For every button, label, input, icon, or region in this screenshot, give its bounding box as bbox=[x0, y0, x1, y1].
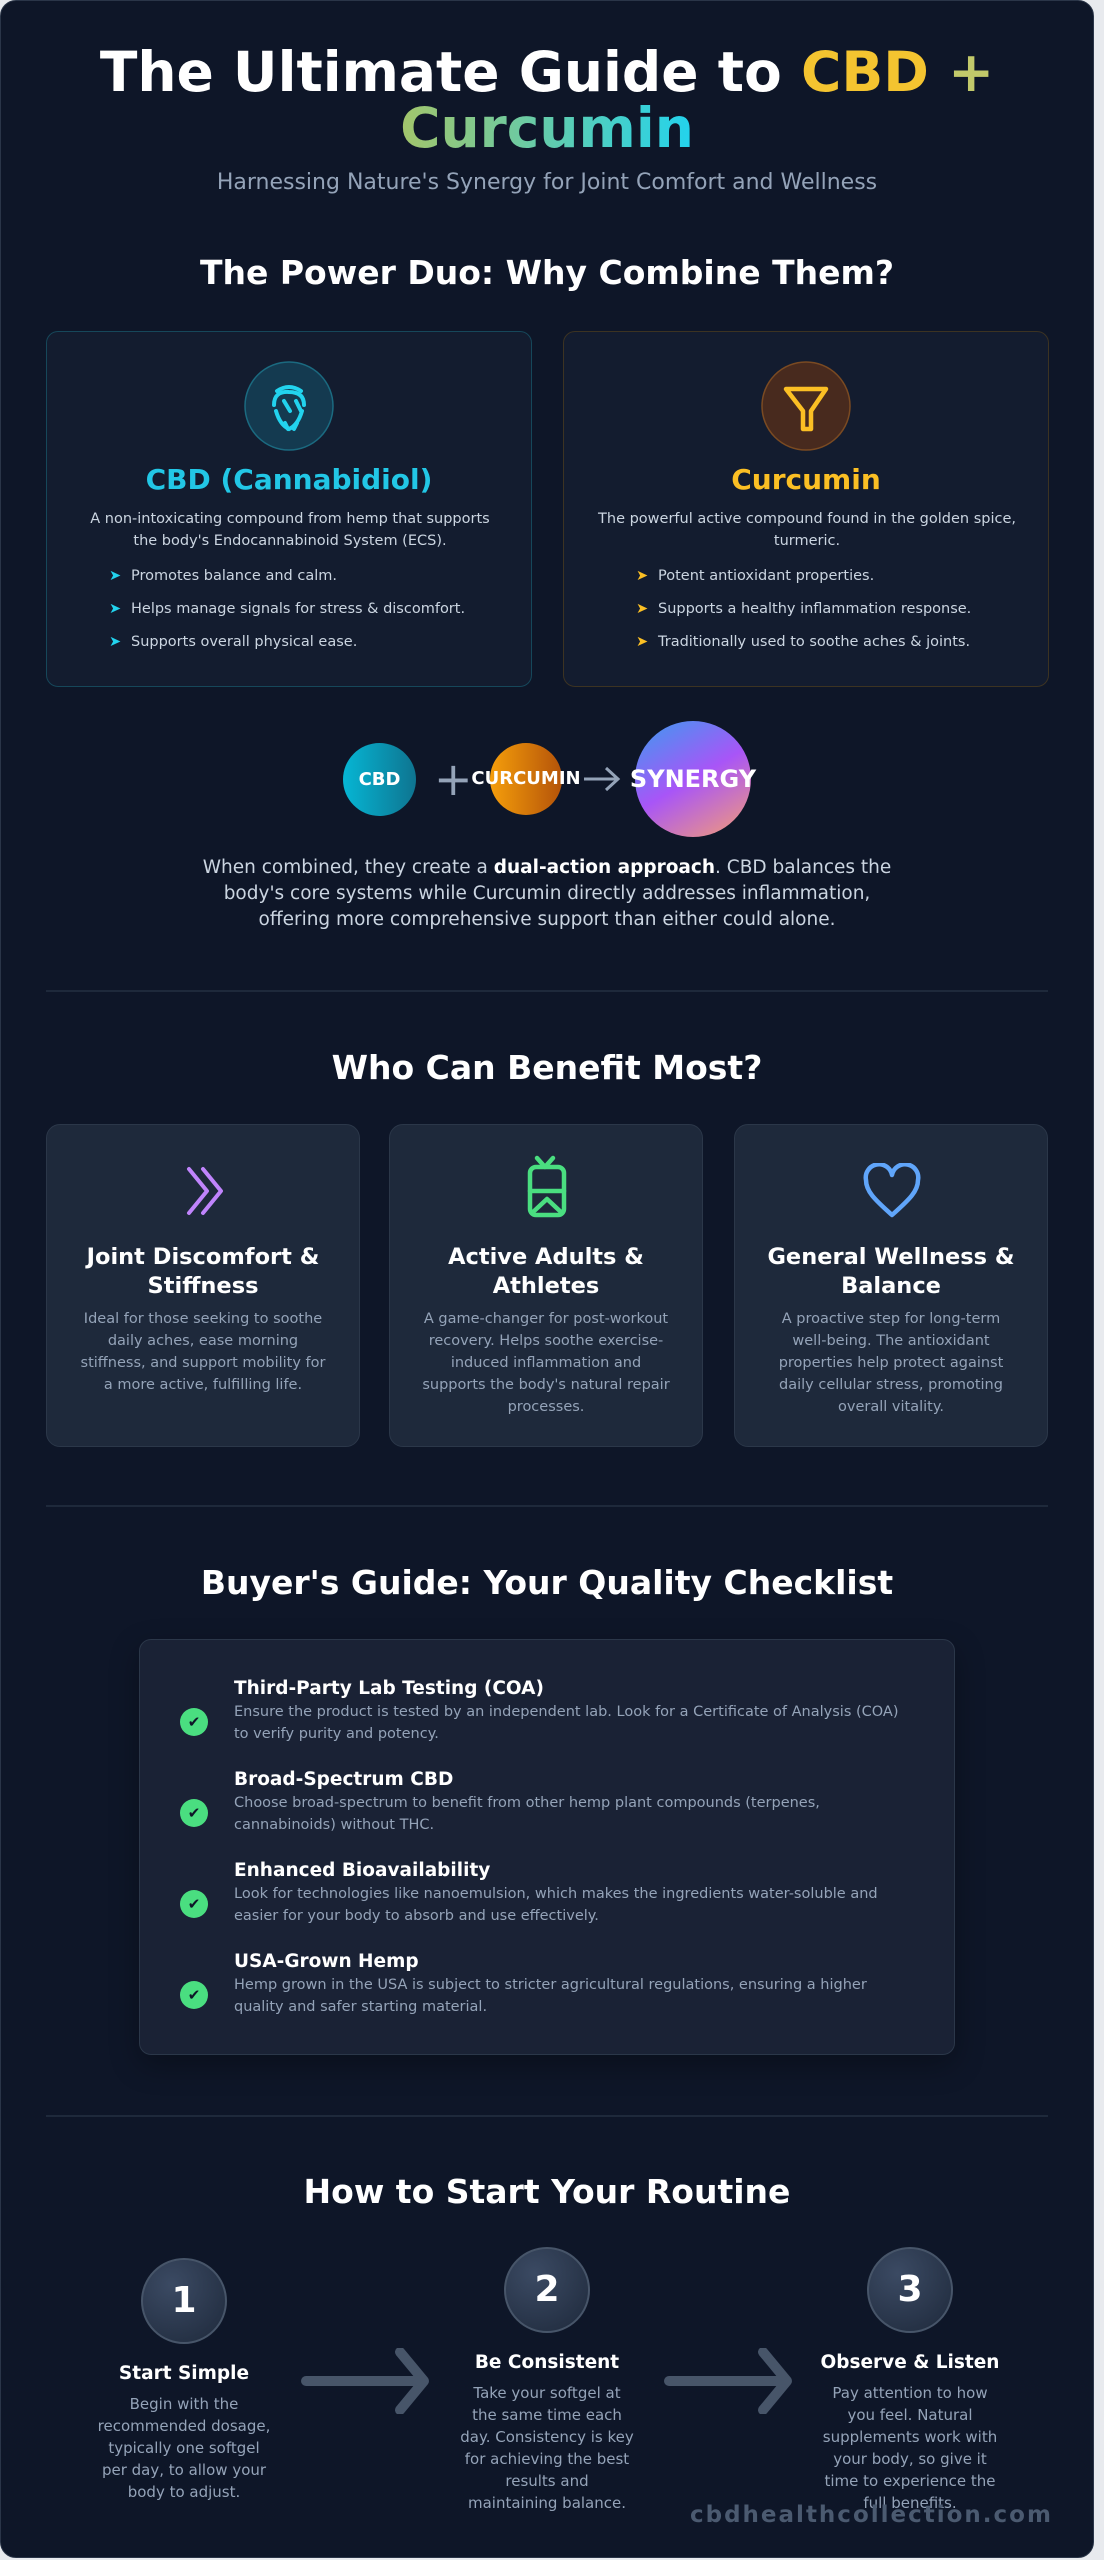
icon: funnel bbox=[761, 361, 851, 451]
item: broad spectrum bbox=[180, 1769, 820, 1833]
icon: CBD bbox=[244, 361, 334, 451]
icon: chevrons bbox=[186, 1166, 223, 1216]
icon: green bbox=[528, 1156, 566, 1218]
step 1: 1 bbox=[171, 2280, 197, 2321]
panel: CBD: Helps manage signals for stress & discomfort. bbox=[131, 601, 465, 617]
title bbox=[100, 40, 994, 160]
card title: CBD (Cannabidiol) bbox=[146, 463, 432, 496]
bullets: ➤ bbox=[636, 568, 648, 584]
step 3: Pay attention to how you feel. Natural supplements work with your body, so give it time to experience the full benefits. bbox=[823, 2384, 997, 2512]
card: athletes: A game-changer for post-workout recovery. Helps soothe exercise-induced inflammation and supports the body's natural repair processes. bbox=[422, 1311, 670, 1415]
circle: Curcumin bbox=[490, 743, 562, 815]
text: USA-Grown Hemp bbox=[234, 1951, 419, 1972]
icon: heart bbox=[864, 1163, 920, 1218]
circle: synergy bbox=[635, 721, 751, 837]
panel: Curcumin: ➤ bbox=[636, 601, 648, 617]
step 3 bbox=[820, 2247, 999, 2512]
panel: Curcumin: Traditionally used to soothe aches & joints. bbox=[658, 634, 970, 650]
bullets: Promotes balance and calm. bbox=[131, 568, 337, 584]
text: Hemp grown in the USA is subject to stricter agricultural regulations, ensuring a higher bbox=[234, 1977, 867, 1993]
circle: CBD: CBD bbox=[359, 769, 400, 790]
text: ✔ bbox=[188, 1804, 200, 1822]
card: joint bbox=[46, 1124, 360, 1447]
subtitle: Harnessing Nature's Synergy for Joint Comfort and Wellness bbox=[217, 170, 877, 195]
heading: who benefits: Who Can Benefit Most? bbox=[332, 1048, 762, 1087]
heading: buyer's guide: Buyer's Guide: Your Quality Checklist bbox=[201, 1563, 893, 1602]
card: wellness: Balance bbox=[841, 1273, 941, 1299]
step 2: Take your softgel at the same time each day. Consistency is key for achieving the best results and maintaining balance. bbox=[460, 2384, 634, 2512]
step 1 bbox=[98, 2258, 270, 2501]
panel: Curcumin: ➤ bbox=[636, 634, 648, 650]
item: usa hemp bbox=[180, 1951, 867, 2015]
circle: Curcumin: CURCUMIN bbox=[471, 768, 581, 789]
arrow bbox=[584, 767, 620, 791]
text: ✔ bbox=[188, 1986, 200, 2004]
circle: synergy: SYNERGY bbox=[630, 765, 756, 793]
step 1: Begin with the recommended dosage, typically one softgel per day, to allow your body to adjust. bbox=[98, 2395, 270, 2501]
card: athletes bbox=[389, 1124, 703, 1447]
panel: Curcumin bbox=[563, 331, 1049, 687]
title: The Ultimate Guide to CBD + bbox=[100, 40, 994, 104]
watermark: cbdhealthcollection.com bbox=[690, 2502, 1053, 2528]
text: Look for technologies like nanoemulsion, which makes the ingredients water-soluble and bbox=[234, 1886, 878, 1902]
heading: routine: How to Start Your Routine bbox=[304, 2172, 790, 2211]
step 3: 3 bbox=[897, 2269, 923, 2310]
arrow 2 bbox=[664, 2348, 792, 2414]
card title: Curcumin bbox=[731, 463, 881, 496]
step 1: Start Simple bbox=[119, 2363, 249, 2384]
text: ✔ bbox=[188, 1895, 200, 1913]
panel: CBD: ➤ bbox=[109, 601, 121, 617]
circle: CBD bbox=[343, 743, 416, 816]
text: Third-Party Lab Testing (COA) bbox=[234, 1678, 544, 1699]
bullets: Potent antioxidant properties. bbox=[658, 568, 874, 584]
panel: CBD: ➤ bbox=[109, 634, 121, 650]
card: joint: Stiffness bbox=[148, 1273, 258, 1299]
step 3: Observe & Listen bbox=[820, 2352, 999, 2373]
text: ✔ bbox=[188, 1713, 200, 1731]
step 2 bbox=[460, 2247, 634, 2512]
item: lab testing bbox=[180, 1678, 899, 1742]
icon: plus: + bbox=[434, 752, 473, 806]
title: Curcumin bbox=[400, 96, 694, 160]
bullets: ➤ bbox=[109, 568, 121, 584]
synergy equation bbox=[343, 721, 756, 837]
text: to verify purity and potency. bbox=[234, 1726, 439, 1742]
card: athletes: Active Adults & bbox=[448, 1244, 644, 1270]
panel: CBD: Supports overall physical ease. bbox=[131, 634, 357, 650]
text: cannabinoids) without THC. bbox=[234, 1817, 434, 1833]
panel: checklist bbox=[139, 1639, 955, 2055]
card: joint: Joint Discomfort & bbox=[87, 1244, 319, 1270]
card: wellness: A proactive step for long-term well-being. The antioxidant properties help protect against daily cellular stress, promoting overall vitality. bbox=[779, 1311, 1003, 1415]
card: wellness: General Wellness & bbox=[767, 1244, 1015, 1270]
panel: Curcumin: Supports a healthy inflammation response. bbox=[658, 601, 971, 617]
paragraph: dual action: When combined, they create a dual-action approach. CBD balances the body's core systems while Curcumin directly addresses inflammation, offering more comprehensive support than either could alone. bbox=[203, 857, 891, 930]
text: Ensure the product is tested by an independent lab. Look for a Certificate of Analysis (COA) bbox=[234, 1704, 899, 1720]
text: easier for your body to absorb and use effectively. bbox=[234, 1908, 599, 1924]
card: athletes: Athletes bbox=[493, 1273, 599, 1299]
step 2: 2 bbox=[534, 2269, 560, 2310]
text: Broad-Spectrum CBD bbox=[234, 1769, 453, 1790]
card: wellness bbox=[734, 1124, 1048, 1447]
card: joint: Ideal for those seeking to soothe daily aches, ease morning stiffness, and support mobility for a more active, fulfilling life. bbox=[81, 1311, 325, 1393]
description: The powerful active compound found in the golden spice, turmeric. bbox=[598, 511, 1016, 549]
arrow 1 bbox=[301, 2348, 429, 2414]
text: quality and safer starting material. bbox=[234, 1999, 487, 2015]
text: Choose broad-spectrum to benefit from other hemp plant compounds (terpenes, bbox=[234, 1795, 820, 1811]
step 2: Be Consistent bbox=[475, 2352, 619, 2373]
description: A non-intoxicating compound from hemp that supports the body's Endocannabinoid System (ECS). bbox=[90, 511, 490, 549]
item: bioavailability bbox=[180, 1860, 878, 1924]
text: Enhanced Bioavailability bbox=[234, 1860, 490, 1881]
panel: CBD bbox=[46, 331, 532, 687]
heading: power duo: The Power Duo: Why Combine Them? bbox=[200, 253, 894, 292]
